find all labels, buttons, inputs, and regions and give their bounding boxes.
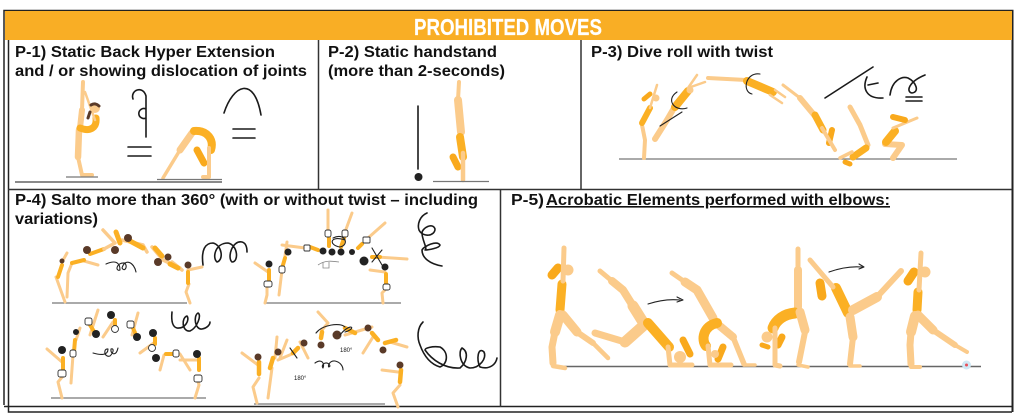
- symbol: arch: [224, 88, 261, 138]
- P-2 heading: (more than 2-seconds): [328, 63, 505, 80]
- figure group: bottom-right salto with twist: [242, 312, 407, 407]
- P-2 heading: P-2) Static handstand: [328, 44, 497, 61]
- figure group: top-right salto with twist: [255, 210, 407, 303]
- panel: P-3 dive roll: [591, 44, 957, 164]
- figure: bridge: [157, 131, 222, 180]
- P-3 heading: P-3) Dive roll with twist: [591, 44, 774, 61]
- figure: kick over: [810, 260, 901, 366]
- arrow: [648, 297, 683, 304]
- symbol: triple salto: [202, 242, 247, 265]
- figure group: bottom-right salto with twist: 180°: [294, 376, 307, 382]
- figure: finish lunge: [908, 253, 967, 367]
- panel: P-5 elbows: [511, 192, 981, 370]
- ground: [558, 366, 981, 368]
- figure group: bottom-right salto with twist: 180°: [340, 348, 353, 354]
- figure group: bottom-left salto: [47, 310, 202, 398]
- P-1 heading: P-1) Static Back Hyper Extension: [15, 44, 275, 61]
- figure: takeoff: [642, 85, 660, 158]
- panel: P-2 handstand: [328, 44, 505, 182]
- P-4 heading: P-4) Salto more than 360° (with or without twist – including: [15, 192, 478, 209]
- figure: roll: [840, 107, 868, 164]
- header banner: [5, 11, 1012, 40]
- figure: standing split: [66, 82, 100, 177]
- figure: standing lunge: [552, 248, 608, 368]
- figure: descent: [783, 85, 835, 150]
- symbols: twist: [825, 67, 925, 101]
- figure: dive: [655, 75, 705, 139]
- figure: elbow bridge: [672, 273, 755, 365]
- figure group: top-left salto: [56, 230, 202, 303]
- symbol: double salto: [172, 312, 210, 331]
- panel: P-4 salto: [15, 192, 497, 407]
- symbol: handstand: [414, 106, 422, 181]
- figure: flight: [708, 74, 785, 103]
- ground: [619, 158, 957, 160]
- P-5 heading: Acrobatic Elements performed with elbows:: [546, 192, 890, 209]
- figure: handstand: [433, 82, 489, 182]
- symbol: twist spiral: [418, 213, 442, 266]
- figure: forward walkover: [595, 271, 692, 365]
- arrow: [829, 264, 864, 272]
- figure: leg raise bridge: [762, 249, 808, 367]
- symbol: twist spiral long: [418, 322, 497, 368]
- P-4 heading: variations): [15, 211, 98, 228]
- P-1 heading: and / or showing dislocation of joints: [15, 63, 307, 80]
- grounds: [51, 303, 401, 404]
- symbol: back split: [128, 90, 151, 156]
- P-5 heading: P-5): [511, 192, 544, 209]
- figure: crouch: [885, 117, 917, 158]
- header banner: PROHIBITED MOVES: [414, 14, 602, 40]
- panel: P-1 back hyperextension: [15, 44, 307, 182]
- icon: small badge: [962, 360, 971, 370]
